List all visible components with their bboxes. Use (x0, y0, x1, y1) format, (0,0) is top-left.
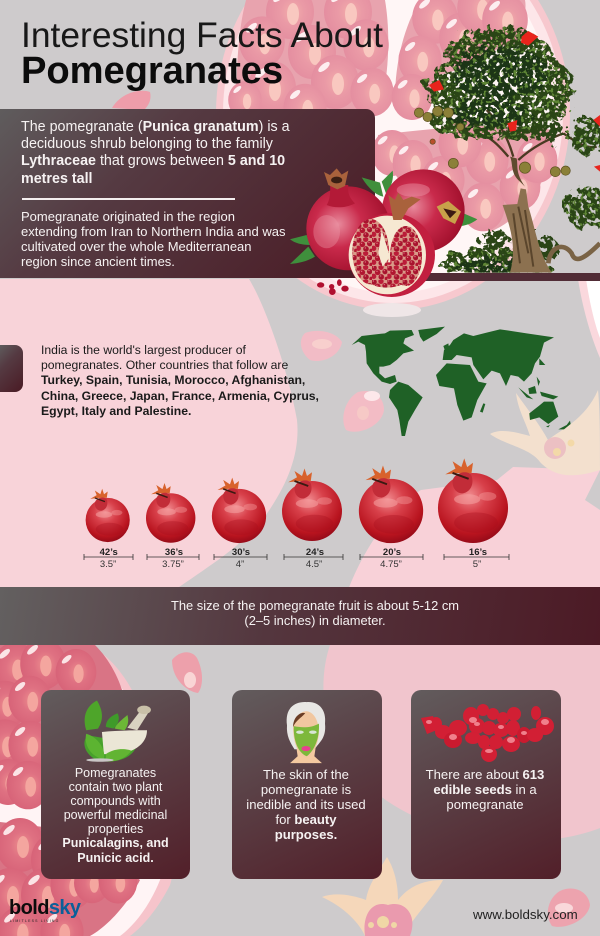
card text: The skin of the (263, 767, 349, 782)
fruit 30's: 4” (236, 559, 244, 570)
producers text: pomegranates. Other countries that follow are (41, 358, 288, 372)
size text: The size of the pomegranate fruit is about 5-12 cm (171, 598, 459, 613)
card: seeds (411, 690, 561, 879)
right pink fruit slice (348, 467, 600, 590)
bonsai tree and fruit artwork (84, 24, 600, 567)
right rim slice (578, 279, 600, 358)
website url: www.boldsky.com (473, 907, 578, 922)
pale drop below fruit (363, 303, 421, 317)
card text: edible seeds in a (433, 782, 537, 797)
logo: boldsky: LIMITLESS LIVING (10, 919, 60, 923)
thin band under tree (375, 273, 600, 281)
card text: Punicalagins, and (62, 836, 169, 850)
bottom flower (322, 857, 443, 936)
card text: There are about 613 (426, 767, 544, 782)
producers text (41, 343, 319, 418)
fruit 36's (146, 483, 199, 570)
origin text (21, 209, 285, 269)
pale seed beside map (343, 391, 384, 432)
size text (171, 598, 459, 628)
card text: properties (88, 822, 143, 836)
icon: world map (352, 327, 571, 436)
intro text: The pomegranate (Punica granatum) is a (21, 119, 290, 135)
card text: contain two plant (69, 780, 162, 794)
intro text: metres tall (21, 171, 93, 187)
card text (246, 767, 366, 842)
fruit 42's (84, 489, 133, 570)
producers text: Turkey, Spain, Tunisia, Morocco, Afghanistan, (41, 373, 305, 387)
card text: compounds with (70, 794, 161, 808)
card text: purposes. (275, 827, 337, 842)
fruit 16's (438, 458, 509, 570)
card text: inedible and its used (246, 797, 366, 812)
origin text: region since ancient times. (21, 254, 175, 269)
fruit 16's: 5” (473, 559, 481, 570)
lower right big disc (323, 645, 600, 841)
size text: (2–5 inches) in diameter. (244, 613, 386, 628)
card text: pomegranate (446, 797, 524, 812)
origin text: cultivated over the whole Mediterranean (21, 239, 252, 254)
card: beauty (232, 690, 382, 879)
origin text: Pomegranate originated in the region (21, 209, 235, 224)
lower left fruit (0, 638, 173, 936)
title: Pomegranates (21, 49, 283, 92)
origin text: extending from Iran to Northern India and was (21, 224, 285, 239)
pale seed above map (301, 331, 342, 361)
middle left pink fruit (0, 279, 298, 590)
fruit 16's: 16’s (469, 547, 487, 558)
side tab (0, 345, 23, 392)
card text: Pomegranates (75, 766, 156, 780)
fruit 42's: 42’s (100, 547, 118, 558)
producers text: Egypt, Italy and Palestine. (41, 404, 191, 418)
fruit 42's: 3.5” (100, 559, 116, 570)
fruit 36's: 3.75” (162, 559, 184, 570)
flower right of map (490, 390, 600, 475)
producers text: India is the world's largest producer of (41, 343, 246, 357)
title: Interesting Facts About (21, 15, 383, 55)
fruit 30's (212, 478, 267, 570)
intro text: deciduous shrub belonging to the family (21, 136, 273, 152)
pomegranate size row (84, 458, 509, 570)
fruit 36's: 36’s (165, 547, 183, 558)
bottom right seed (548, 889, 590, 927)
icon: main pomegranates (290, 168, 477, 297)
fruit 24's: 24’s (306, 547, 324, 558)
intro text: Lythraceae that grows between 5 and 10 (21, 153, 285, 169)
fruit 24's (282, 468, 343, 570)
panel: botanical intro (0, 109, 375, 278)
fruit 30's: 30’s (232, 547, 250, 558)
logo: boldsky: boldsky (9, 897, 80, 919)
intro text (21, 119, 290, 187)
fruit 20's: 4.75” (380, 559, 402, 570)
icon: aril pile (421, 704, 554, 762)
fruit 20's: 20’s (383, 547, 401, 558)
producers text: China, Greece, Japan, France, Armenia, Cyprus, (41, 389, 319, 403)
fruit 20's (359, 465, 423, 570)
card text: pomegranate is (261, 782, 351, 797)
card: plant compounds (41, 690, 190, 879)
fruit 24's: 4.5” (306, 559, 322, 570)
icon: mortar and leaves (84, 700, 151, 762)
seed above first card (172, 652, 202, 693)
small seed behind title (112, 91, 151, 110)
icon: face mask (286, 702, 326, 764)
card text: for beauty (275, 812, 337, 827)
card text: powerful medicinal (64, 808, 167, 822)
icon: bonsai tree (414, 28, 600, 277)
card text (426, 767, 544, 812)
top cross-section pomegranate (216, 0, 570, 310)
card text: Punicic acid. (77, 851, 154, 865)
card text (62, 766, 169, 865)
title (21, 15, 383, 92)
size band (0, 587, 600, 645)
